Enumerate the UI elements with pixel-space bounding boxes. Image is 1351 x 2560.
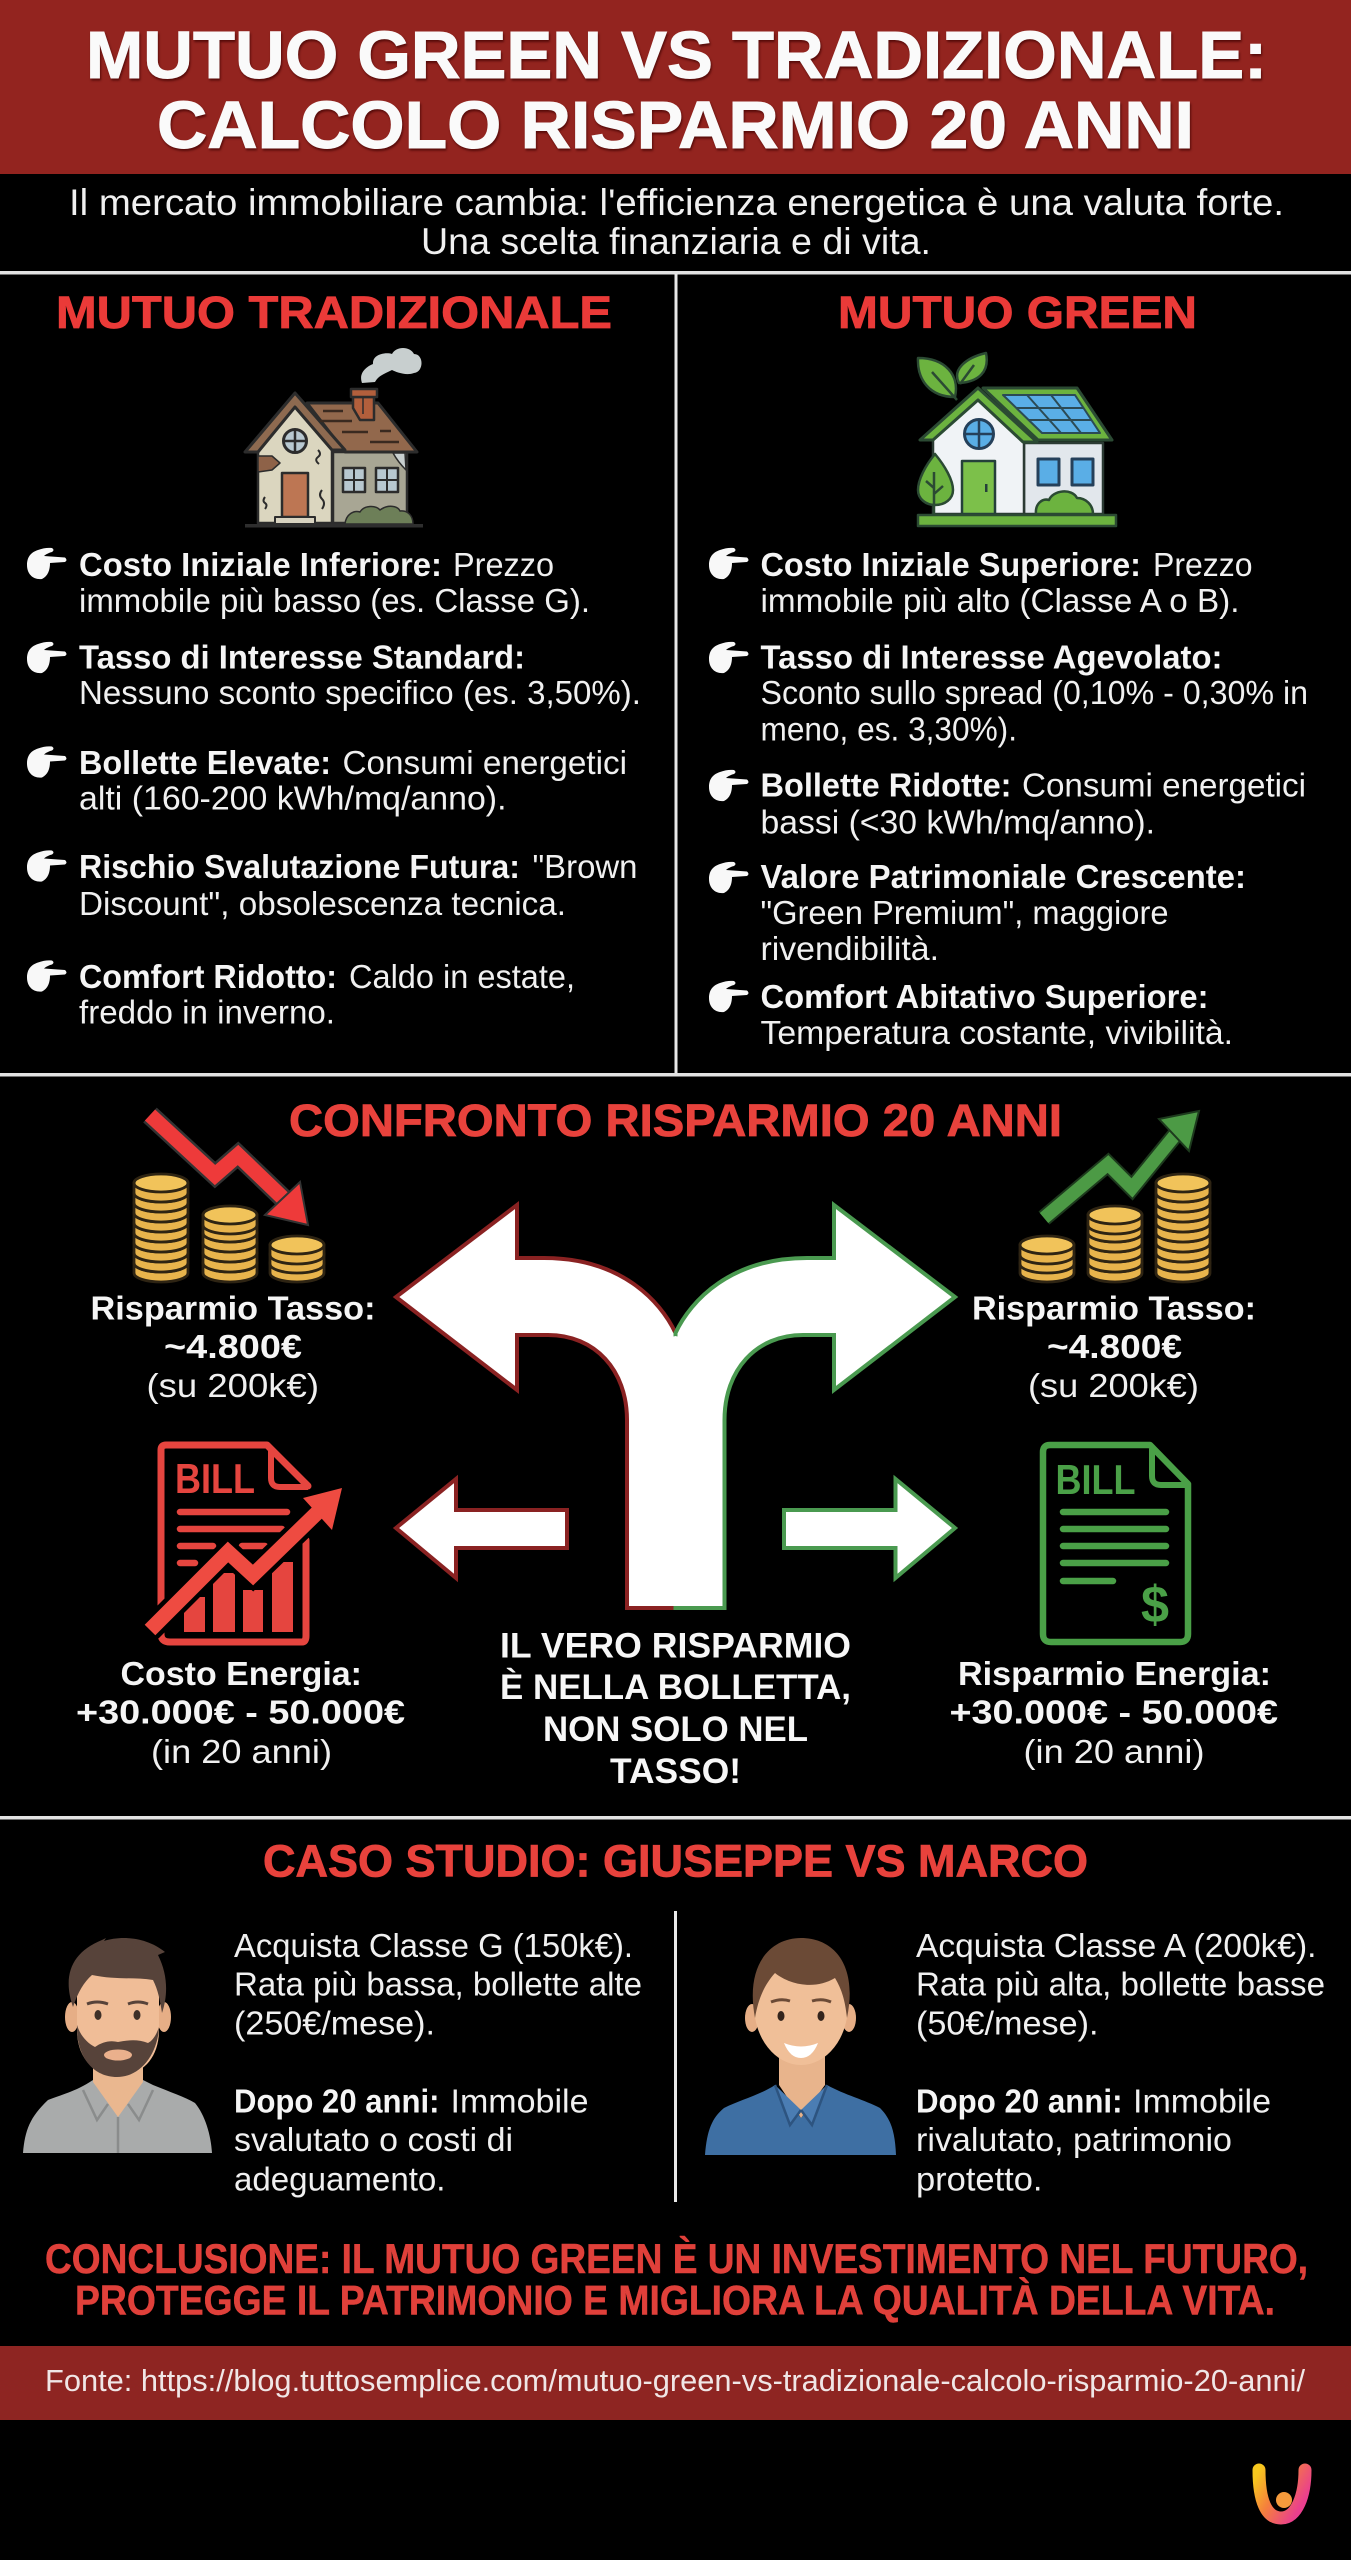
footer source band (0, 2346, 1351, 2420)
item: comfort ridotto: freddo in inverno. (79, 994, 335, 1030)
item: costo iniziale inferiore: Prezzo (453, 546, 554, 583)
item: costo iniziale superiore (709, 546, 1252, 619)
subtitle (69, 182, 1284, 262)
panel: caso studio (23, 1836, 1325, 2202)
conclusion (45, 2235, 1308, 2324)
avatar: giuseppe (23, 1938, 212, 2153)
stat: risparmio tasso left: Risparmio Tasso: (90, 1290, 376, 1326)
arrow: small left (396, 1479, 567, 1578)
title (86, 18, 1267, 163)
item: bollette ridotte: bassi (<30 kWh/mq/anno). (760, 804, 1155, 840)
item: comfort abitativo: Comfort Abitativo Superiore: (760, 978, 1208, 1015)
callout: vero risparmio: IL VERO RISPARMIO (500, 1626, 851, 1666)
item: valore patrimoniale: rivendibilità. (760, 930, 939, 967)
stat: costo energia: (in 20 anni) (151, 1733, 332, 1770)
text: marco: protetto. (916, 2160, 1042, 2198)
header band (0, 0, 1351, 174)
arrow: small right (784, 1479, 955, 1578)
item: bollette ridotte: Bollette Ridotte: (760, 766, 1012, 804)
item: bollette ridotte: Consumi energetici (1022, 766, 1306, 804)
text: marco: Immobile (1133, 2082, 1271, 2120)
icon: green bill (1043, 1445, 1188, 1642)
text: giuseppe: adeguamento. (234, 2160, 446, 2198)
heading: caso studio: CASO STUDIO: GIUSEPPE VS MARCO (263, 1836, 1088, 1886)
stat: risparmio tasso left: ~4.800€ (164, 1328, 302, 1365)
icon: old house (245, 348, 423, 528)
icon: green bill: $ (1141, 1576, 1169, 1634)
title: MUTUO GREEN VS TRADIZIONALE: (86, 18, 1267, 93)
item: valore patrimoniale (709, 858, 1246, 967)
panel: confronto risparmio (76, 1095, 1278, 1791)
item: bollette elevate (27, 744, 627, 816)
stat: risparmio tasso left: (su 200k€) (146, 1367, 319, 1404)
stat: costo energia: +30.000€ - 50.000€ (76, 1694, 405, 1730)
icon: coins with rising arrow (1020, 1111, 1210, 1282)
stat: costo energia: Costo Energia: (120, 1655, 362, 1692)
stat: costo energia (76, 1655, 405, 1770)
icon: green house (918, 353, 1116, 526)
stat: risparmio tasso right (972, 1290, 1256, 1404)
item: tasso agevolato: meno, es. 3,30%). (760, 710, 1017, 748)
item: comfort ridotto: Comfort Ridotto: (79, 958, 337, 995)
stat: risparmio energia: (in 20 anni) (1024, 1733, 1204, 1770)
item: rischio svalutazione (27, 848, 638, 922)
text: giuseppe: svalutato o costi di (234, 2121, 513, 2158)
item: costo iniziale superiore: Costo Iniziale Superiore: (760, 546, 1141, 583)
item: tasso agevolato: Sconto sullo spread (0,10% - 0,30% in (760, 674, 1308, 711)
panel: mutuo green (709, 287, 1308, 1051)
item: valore patrimoniale: Valore Patrimoniale Crescente: (760, 858, 1246, 895)
stat: risparmio tasso right: ~4.800€ (1047, 1328, 1182, 1365)
text: marco: (50€/mese). (916, 2004, 1098, 2042)
item: tasso agevolato: Tasso di Interesse Agevolato: (760, 638, 1222, 676)
text: marco (916, 1927, 1325, 2198)
item: bollette elevate: Consumi energetici (342, 744, 627, 781)
icon: red bill: BILL (175, 1455, 255, 1502)
icon: red bill (150, 1445, 342, 1642)
text: marco: rivalutato, patrimonio (916, 2121, 1232, 2158)
item: tasso standard: Tasso di Interesse Standard: (79, 638, 525, 676)
item: comfort ridotto: Caldo in estate, (349, 958, 575, 995)
text: giuseppe (234, 1927, 642, 2198)
text: giuseppe: Rata più bassa, bollette alte (234, 1966, 642, 2002)
callout: vero risparmio (500, 1626, 851, 1791)
item: costo iniziale superiore: immobile più alto (Classe A o B). (760, 582, 1240, 619)
item: costo iniziale inferiore: Costo Iniziale Inferiore: (79, 546, 442, 583)
item: valore patrimoniale: "Green Premium", maggiore (760, 894, 1168, 931)
item: costo iniziale superiore: Prezzo (1153, 546, 1252, 583)
item: rischio svalutazione: Discount", obsolescenza tecnica. (79, 885, 566, 922)
text: giuseppe: Immobile (450, 2082, 588, 2120)
item: costo iniziale inferiore: immobile più basso (es. Classe G). (79, 582, 590, 619)
title: CALCOLO RISPARMIO 20 ANNI (157, 88, 1194, 163)
subtitle: Il mercato immobiliare cambia: l'efficienza energetica è una valuta forte. (69, 182, 1284, 223)
item: tasso standard: Nessuno sconto specifico (es. 3,50%). (79, 674, 641, 711)
arrow: big split arrow (396, 1205, 955, 1608)
item: rischio svalutazione: "Brown (532, 848, 638, 885)
item: bollette elevate: Bollette Elevate: (79, 744, 331, 781)
heading: mutuo green: MUTUO GREEN (838, 287, 1197, 338)
item: comfort abitativo (709, 978, 1233, 1051)
footer source band: Fonte: https://blog.tuttosemplice.com/mutuo-green-vs-tradizionale-calcolo-risparmio-20-anni/ (45, 2363, 1305, 2398)
icon: logo (1259, 2470, 1305, 2518)
text: giuseppe: (250€/mese). (234, 2004, 435, 2042)
heading: confronto: CONFRONTO RISPARMIO 20 ANNI (289, 1095, 1062, 1146)
item: bollette ridotte (709, 766, 1306, 840)
icon: green bill: BILL (1056, 1456, 1136, 1503)
stat: risparmio energia (950, 1655, 1278, 1770)
text: marco: Dopo 20 anni: (916, 2082, 1122, 2120)
item: comfort abitativo: Temperatura costante, vivibilità. (760, 1014, 1233, 1051)
text: marco: Acquista Classe A (200k€). (916, 1927, 1316, 1964)
subtitle: Una scelta finanziaria e di vita. (421, 221, 931, 262)
callout: vero risparmio: TASSO! (610, 1752, 741, 1791)
list: green (709, 546, 1308, 1051)
item: bollette elevate: alti (160-200 kWh/mq/anno). (79, 780, 506, 816)
icon: coins with falling arrow (134, 1115, 324, 1282)
item: costo iniziale inferiore (27, 546, 590, 619)
stat: risparmio tasso left (90, 1290, 376, 1404)
text: giuseppe: Acquista Classe G (150k€). (234, 1927, 633, 1964)
heading: mutuo tradizionale: MUTUO TRADIZIONALE (56, 287, 612, 338)
callout: vero risparmio: NON SOLO NEL (543, 1710, 808, 1749)
text: marco: Rata più alta, bollette basse (916, 1966, 1325, 2002)
item: tasso standard (27, 638, 641, 711)
item: comfort ridotto (27, 958, 575, 1030)
text: giuseppe: Dopo 20 anni: (234, 2082, 440, 2120)
stat: risparmio energia: +30.000€ - 50.000€ (950, 1694, 1278, 1730)
item: rischio svalutazione: Rischio Svalutazione Futura: (79, 848, 520, 885)
callout: vero risparmio: È NELLA BOLLETTA, (500, 1667, 851, 1707)
item: tasso agevolato (709, 638, 1308, 748)
avatar: marco (705, 1938, 896, 2155)
stat: risparmio tasso right: (su 200k€) (1028, 1367, 1199, 1404)
panel: mutuo tradizionale (27, 287, 641, 1030)
stat: risparmio tasso right: Risparmio Tasso: (972, 1290, 1256, 1326)
stat: risparmio energia: Risparmio Energia: (958, 1655, 1271, 1692)
list: tradizionale (27, 546, 641, 1030)
